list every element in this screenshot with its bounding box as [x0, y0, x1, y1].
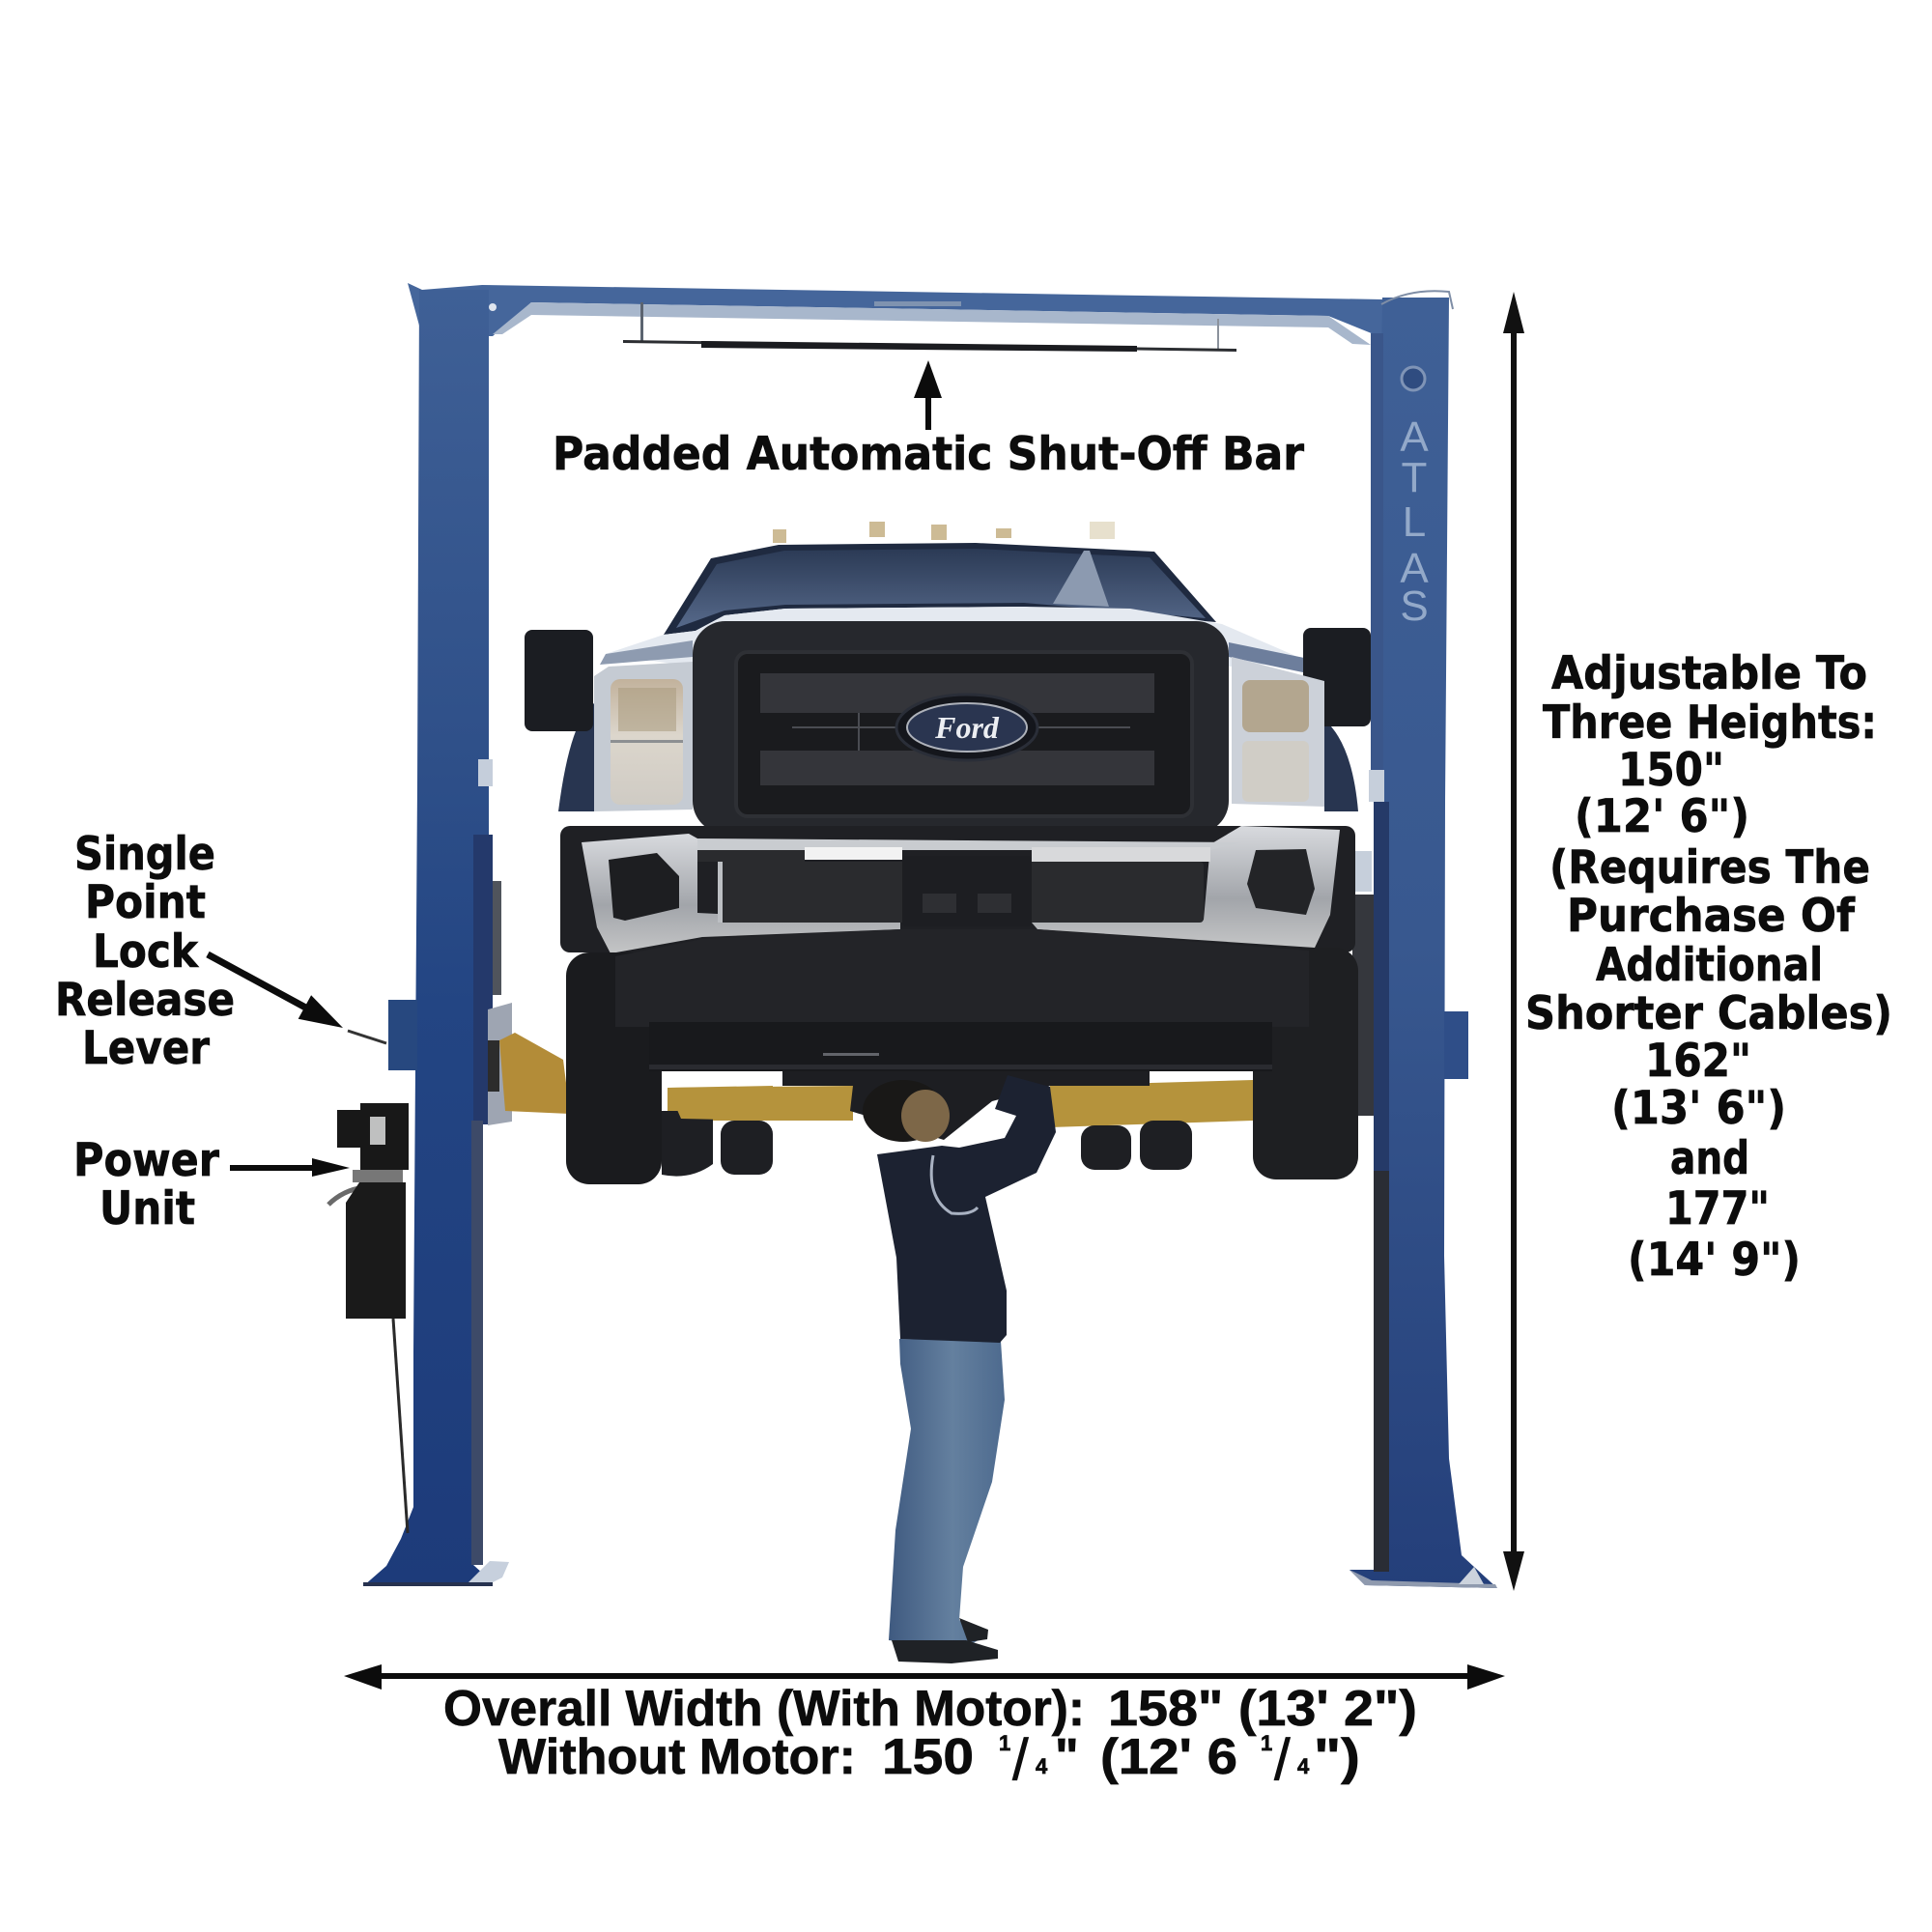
label: adjustable heights: (Requires The	[1549, 841, 1870, 895]
left post lock bracket	[388, 1000, 417, 1070]
fenders	[558, 703, 1358, 811]
cord	[393, 1319, 408, 1533]
label: single point lock release lever: Release	[55, 974, 235, 1027]
label: width without motor: 1	[1261, 1731, 1272, 1755]
grille	[693, 621, 1229, 834]
valve band	[353, 1170, 403, 1182]
overhead beam	[408, 283, 1383, 345]
label: adjustable heights: 162"	[1645, 1035, 1751, 1088]
bumper	[560, 826, 1355, 953]
label: single point lock release lever: Point	[85, 876, 206, 929]
lower body	[615, 929, 1309, 1027]
label: overall width with motor	[443, 1681, 1417, 1737]
padded automatic shut-off bar	[623, 302, 1236, 352]
label: width without motor: (12' 6	[1100, 1729, 1237, 1785]
label: single point lock release lever	[55, 828, 235, 1075]
windshield	[664, 543, 1216, 635]
label: adjustable heights: Purchase Of	[1567, 890, 1856, 943]
label: single point lock release lever: Lever	[82, 1022, 211, 1075]
label: adjustable heights: (12' 6")	[1575, 790, 1749, 843]
right post	[1350, 291, 1497, 1588]
label: power unit: Power	[73, 1134, 220, 1187]
label: width without motor: Without Motor:	[498, 1729, 856, 1785]
left headlight	[594, 662, 693, 811]
label: overall width with motor: 158" (13' 2")	[1108, 1681, 1417, 1737]
Ford oval badge: Ford	[934, 710, 1000, 745]
ATLAS post lettering: L	[1403, 498, 1426, 546]
label: padded automatic shut-off bar: Padded Automatic Shut-Off Bar	[553, 428, 1305, 481]
right mirror	[1303, 628, 1371, 726]
ATLAS post lettering: S	[1400, 582, 1429, 630]
label: adjustable heights: Shorter Cables)	[1525, 987, 1892, 1040]
head	[863, 1080, 950, 1142]
label: width without motor: 1	[999, 1731, 1010, 1755]
left tire	[566, 952, 662, 1184]
undercarriage	[649, 1022, 1272, 1140]
arrow: up to shut-off bar	[914, 360, 942, 430]
shoes	[892, 1618, 998, 1663]
arrow: overall height dimension	[1503, 292, 1524, 1591]
ATLAS post lettering	[1400, 413, 1429, 630]
arms over tires lower section	[668, 1086, 773, 1121]
ATLAS post lettering: A	[1400, 413, 1429, 461]
label: adjustable heights: Adjustable To	[1551, 647, 1867, 700]
left mirror	[525, 630, 593, 731]
sleeve stripes	[931, 1155, 978, 1213]
right post lock bracket	[1444, 1011, 1468, 1079]
label: width without motor: 4	[1297, 1754, 1310, 1778]
person under lift	[863, 1075, 1056, 1663]
label: width without motor: /	[1012, 1727, 1029, 1792]
label: width without motor: 150	[882, 1729, 974, 1785]
label: adjustable heights: (14' 9")	[1628, 1234, 1801, 1287]
jeans	[889, 1339, 1005, 1647]
label: adjustable heights: Additional	[1596, 939, 1823, 992]
label: power unit	[73, 1134, 220, 1236]
label: adjustable heights: 177"	[1665, 1182, 1770, 1236]
motor	[337, 1110, 376, 1148]
left post	[363, 290, 509, 1586]
arrow: overall width dimension	[344, 1664, 1505, 1690]
right tire	[1253, 948, 1358, 1179]
arrow: to power unit	[230, 1158, 350, 1177]
hood edge	[606, 607, 1309, 667]
arrow: to lock release lever	[206, 952, 343, 1028]
label: width without motor	[498, 1727, 1360, 1792]
label: adjustable heights	[1525, 647, 1892, 1287]
label: width without motor: "	[1055, 1729, 1079, 1785]
hose	[328, 1187, 364, 1205]
label: width without motor: /	[1274, 1727, 1291, 1792]
Ford oval badge	[896, 695, 1037, 760]
roof marker lights	[773, 522, 1115, 543]
label: single point lock release lever: Lock	[93, 925, 200, 979]
ATLAS post lettering: T	[1402, 454, 1427, 501]
label: adjustable heights: 150"	[1618, 744, 1724, 797]
label: adjustable heights: (13' 6")	[1611, 1082, 1786, 1135]
truck	[525, 522, 1371, 1184]
inner dual tires	[662, 1111, 1192, 1177]
right headlight	[1232, 657, 1324, 807]
label: power unit: Unit	[99, 1182, 195, 1236]
label: adjustable heights: and	[1670, 1132, 1749, 1185]
yellow lift arms	[488, 1003, 1253, 1127]
lift structure	[363, 283, 1497, 1588]
power unit	[328, 1103, 409, 1533]
tank	[346, 1182, 406, 1319]
post logo	[1402, 367, 1425, 390]
lock release lever	[348, 1031, 386, 1043]
label: width without motor: 4	[1036, 1754, 1048, 1778]
sweatshirt and raised arm	[877, 1075, 1056, 1343]
label: single point lock release lever: Single	[74, 828, 215, 881]
ATLAS post lettering: A	[1400, 545, 1429, 592]
label: overall width with motor: Overall Width (With Motor):	[443, 1681, 1085, 1737]
label: adjustable heights: Three Heights:	[1543, 696, 1877, 750]
label: width without motor: ")	[1314, 1729, 1360, 1785]
